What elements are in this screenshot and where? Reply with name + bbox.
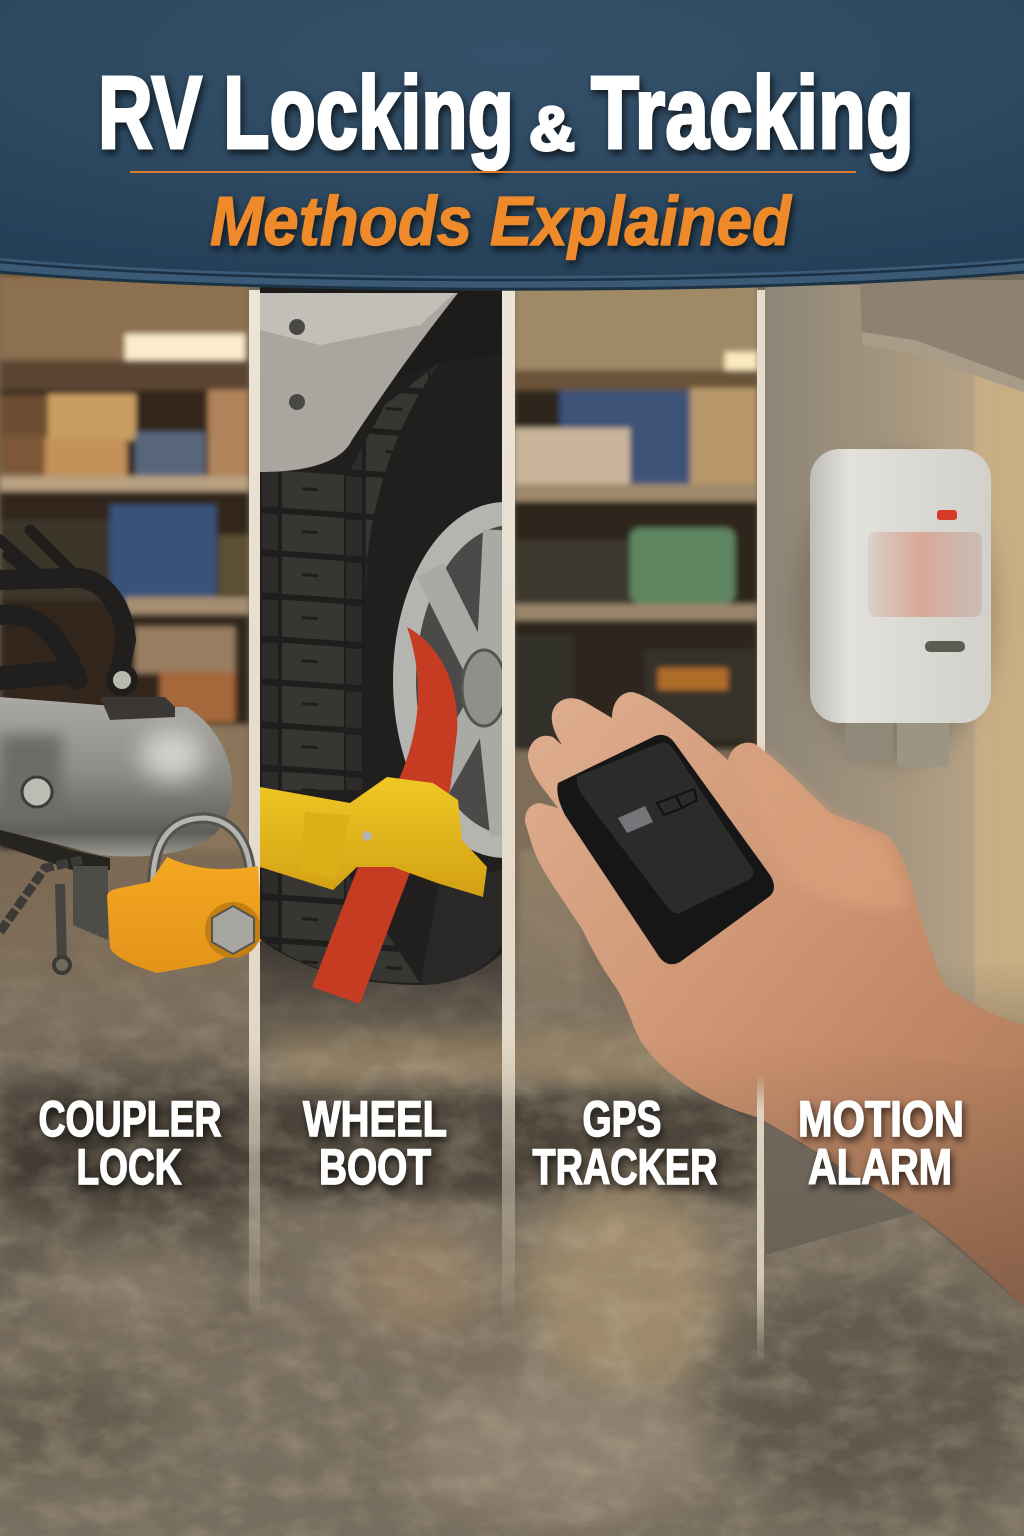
background: storage shelves behind coupler xyxy=(0,274,249,856)
label: motion alarm: ALARM xyxy=(808,1139,952,1195)
icon: GPS tracker device xyxy=(557,735,774,964)
tire xyxy=(260,902,502,985)
bracket under coupler xyxy=(0,830,110,870)
red boot arm xyxy=(312,627,457,1004)
label: coupler lock xyxy=(38,1091,222,1195)
icon: motion sensor xyxy=(795,449,995,767)
title: Tracking xyxy=(591,55,914,170)
panel: wheel boot xyxy=(260,293,502,1004)
coupler body xyxy=(0,697,232,857)
label: GPS tracker: TRACKER xyxy=(532,1139,718,1195)
rim xyxy=(393,502,502,858)
title: & xyxy=(529,95,575,164)
divider: lower segment over arm xyxy=(757,1075,764,1365)
label: motion alarm xyxy=(798,1091,964,1195)
yellow clamp xyxy=(260,777,487,897)
dividers xyxy=(249,290,765,1330)
label: wheel boot xyxy=(303,1091,447,1195)
label: motion alarm: MOTION xyxy=(798,1091,964,1147)
coupler handle xyxy=(0,530,126,680)
background: wheel bay xyxy=(260,285,502,1065)
fender xyxy=(260,293,458,472)
background: alarm wall xyxy=(765,280,1024,1255)
icon: hand holding tracker xyxy=(525,692,1024,1307)
title: RV Locking xyxy=(98,55,514,170)
subtitle: Methods Explained xyxy=(210,182,792,260)
label: wheel boot: WHEEL xyxy=(303,1091,447,1147)
panel: motion alarm xyxy=(795,449,995,767)
background: concrete floor xyxy=(0,940,1024,1536)
header banner xyxy=(0,0,1024,290)
label: GPS tracker xyxy=(532,1091,718,1195)
panel: coupler lock xyxy=(0,530,263,973)
padlock xyxy=(107,818,263,973)
title rule xyxy=(130,171,856,173)
label: GPS tracker: GPS xyxy=(582,1091,662,1147)
title xyxy=(98,55,914,170)
label: coupler lock: COUPLER xyxy=(38,1091,222,1147)
safety chain xyxy=(0,860,82,932)
background: storage shelves behind tracker xyxy=(515,288,758,1006)
label: coupler lock: LOCK xyxy=(76,1139,182,1195)
label: wheel boot: BOOT xyxy=(319,1139,431,1195)
